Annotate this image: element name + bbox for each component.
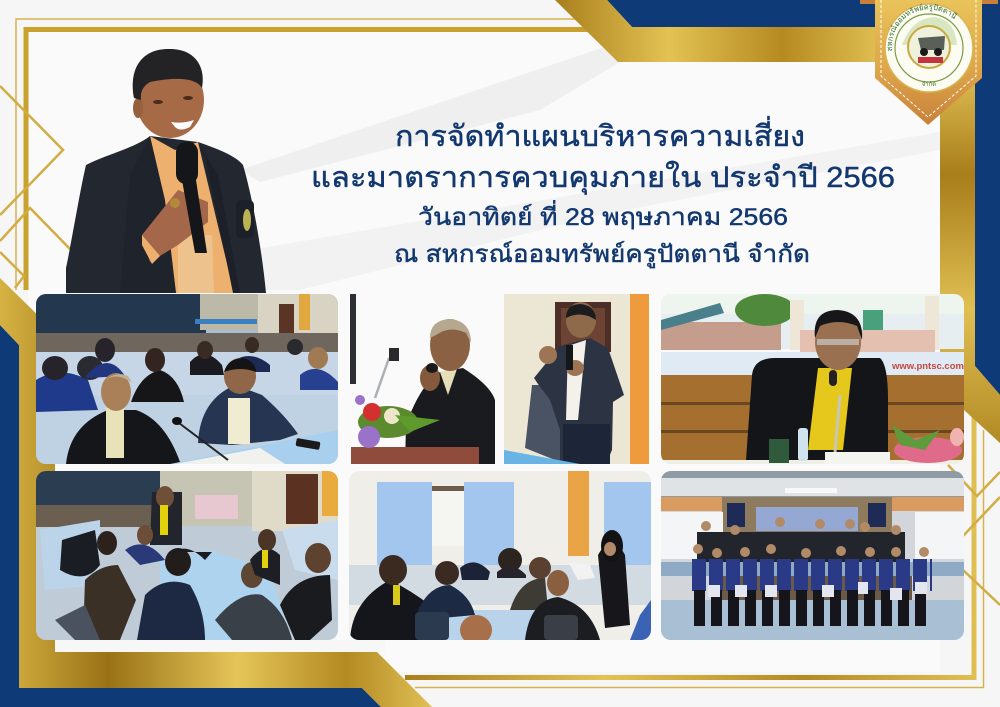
venue line: ณ สหกรณ์ออมทรัพย์ครูปัตตานี จำกัด	[394, 240, 810, 269]
photo: presenter at head table	[661, 294, 964, 466]
navy corner top right	[607, 0, 1000, 27]
photo: group discussion centre	[349, 471, 651, 645]
title block	[311, 116, 895, 269]
photo: standing speaker	[504, 294, 649, 464]
title line 1: การจัดทำแผนบริหารความเสี่ยง	[395, 116, 805, 153]
decorative gold diamonds left	[0, 86, 70, 288]
navy side left	[0, 325, 381, 707]
badge with logo	[860, 0, 998, 125]
logo seal: สหกรณ์ออมทรัพย์ครูปัตตานี	[888, 3, 958, 51]
gold ribbon top right	[555, 0, 880, 62]
photo: speaker at podium	[350, 294, 495, 464]
gold ribbon bottom left	[0, 278, 432, 707]
navy side right	[975, 0, 1000, 395]
gold ribbon side right	[940, 60, 1000, 443]
photo: group portrait	[661, 471, 964, 640]
date line: วันอาทิตย์ ที่ 28 พฤษภาคม 2566	[418, 200, 788, 231]
photo: group discussion left	[36, 471, 338, 640]
speaker portrait	[66, 49, 266, 293]
logo seal: จำกัด	[922, 81, 936, 88]
logo seal	[884, 3, 974, 93]
photo: presenter at head table: www.pntsc.com	[891, 361, 964, 372]
title line 2: และมาตราการควบคุมภายใน ประจำปี 2566	[311, 160, 895, 195]
decorative gold diamonds right	[948, 465, 1000, 605]
photo: seminar room seated participants	[36, 294, 338, 464]
